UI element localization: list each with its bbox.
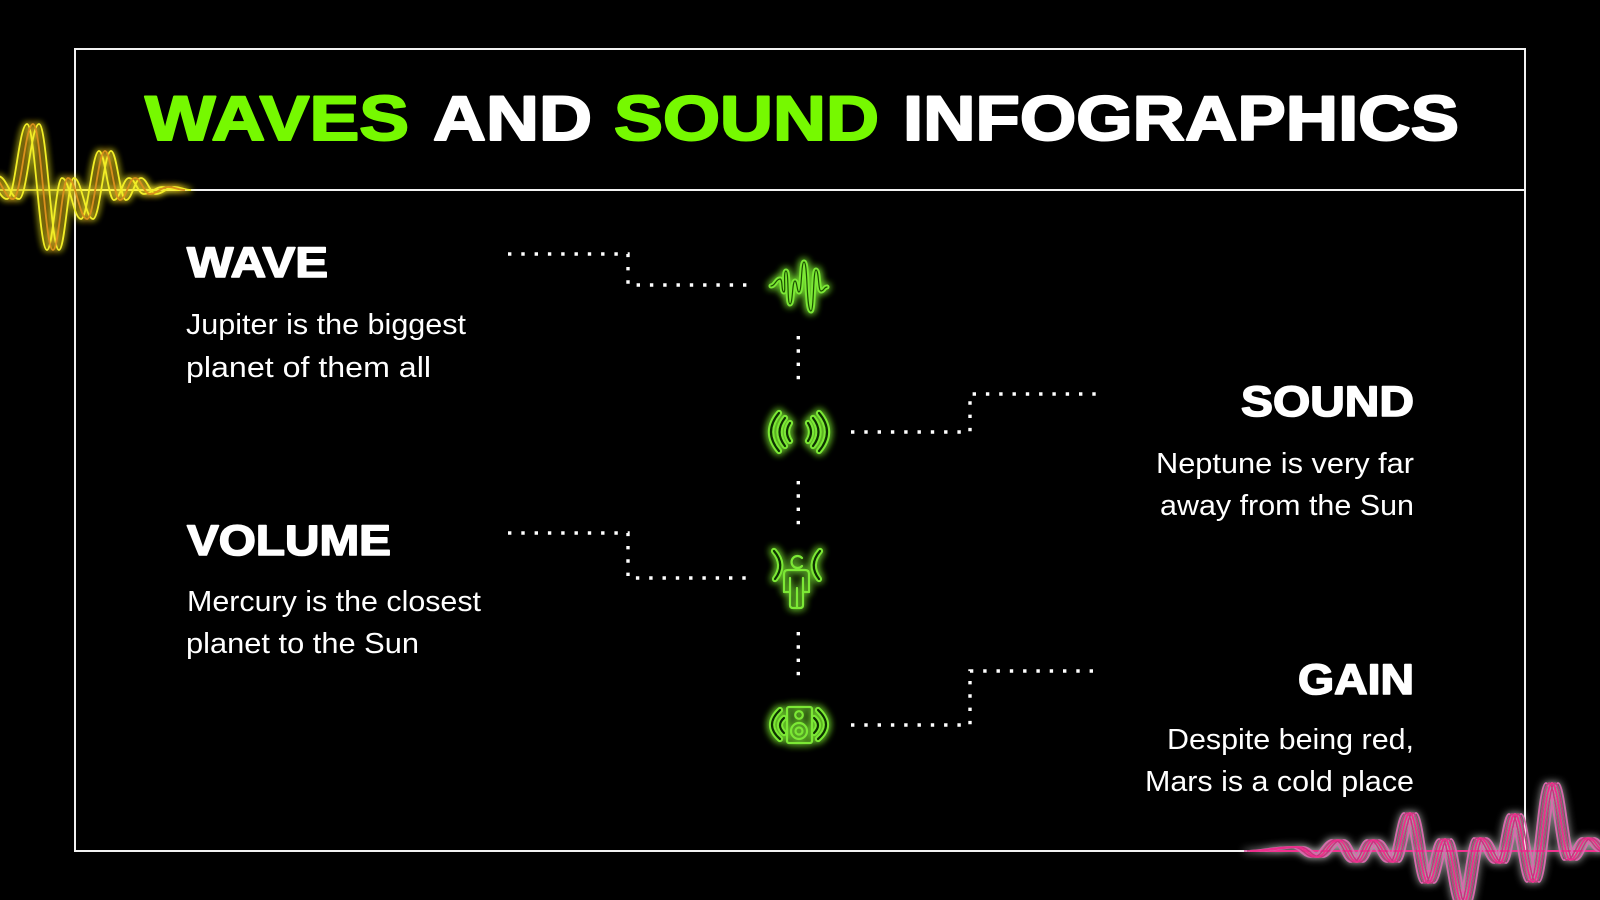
text block: volume: VOLUME <box>187 517 391 565</box>
title: WAVES <box>145 84 409 154</box>
text block: wave: WAVE <box>187 239 328 287</box>
yellow waveform <box>0 124 191 250</box>
icon: sound waves <box>771 413 827 451</box>
text block: gain: Mars is a cold place <box>1145 766 1414 798</box>
text block: wave: planet of them all <box>186 352 431 384</box>
icon: wave <box>771 262 827 311</box>
text block: sound: SOUND <box>1241 378 1414 426</box>
text block: wave: Jupiter is the biggest <box>186 309 466 341</box>
title: INFOGRAPHICS <box>903 84 1459 154</box>
icon: speaker <box>772 707 826 743</box>
text block: volume: planet to the Sun <box>186 628 419 660</box>
text block: volume: Mercury is the closest <box>187 586 481 618</box>
text block: gain: Despite being red, <box>1167 724 1414 756</box>
text block: wave <box>186 239 466 384</box>
title <box>145 84 1459 154</box>
text block: sound: away from the Sun <box>1160 490 1414 522</box>
text block: gain <box>1145 656 1414 798</box>
title: AND <box>433 84 592 154</box>
pink waveform <box>1244 783 1600 900</box>
text block: volume <box>186 517 481 660</box>
text block: gain: GAIN <box>1298 656 1414 704</box>
icon: person with sound <box>774 551 820 608</box>
title: SOUND <box>614 84 879 154</box>
dotted connectors <box>508 254 1096 725</box>
text block: sound <box>1156 378 1414 522</box>
text block: sound: Neptune is very far <box>1156 448 1414 480</box>
